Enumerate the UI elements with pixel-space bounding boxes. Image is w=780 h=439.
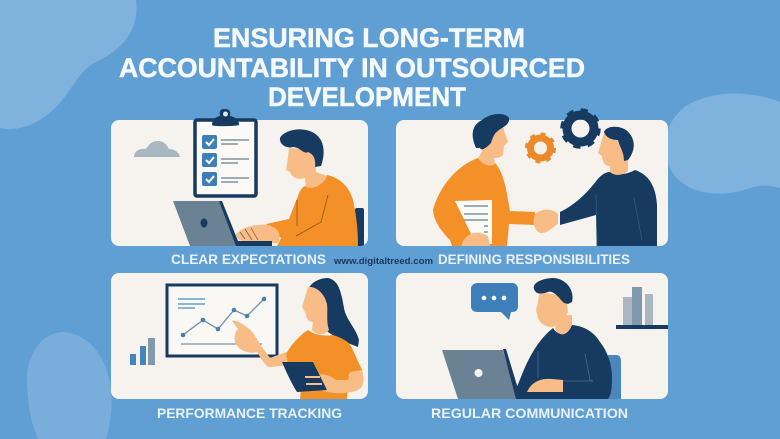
icon: chair (608, 355, 621, 399)
icon: navy gear (562, 110, 598, 146)
icon: laptop (442, 349, 519, 399)
title: DEVELOPMENT (268, 82, 466, 112)
decorative blob: top left (0, 0, 137, 129)
panel: regular communication (396, 273, 668, 399)
label: clear expectations: CLEAR EXPECTATIONS (171, 251, 326, 267)
watermark url: www.digitaltreed.com (333, 256, 433, 267)
panel: clear expectations (111, 109, 368, 248)
chart: screen with line graph (167, 285, 277, 356)
icon: cloud (134, 141, 180, 157)
label: defining responsibilities: DEFINING RESPONSIBILITIES (438, 251, 630, 267)
icon: clipboard checklist (195, 109, 256, 196)
icon: speech bubble (471, 283, 518, 320)
icon: shelf with books (616, 287, 668, 329)
decorative blob: bottom left (27, 332, 112, 439)
title: ACCOUNTABILITY IN OUTSOURCED (119, 53, 585, 83)
label: performance tracking: PERFORMANCE TRACKING (157, 405, 342, 421)
panel: performance tracking (111, 273, 368, 399)
icon: chair (355, 208, 364, 248)
person: woman with tablet (232, 278, 364, 399)
title: ENSURING LONG-TERM (213, 23, 525, 53)
panel: defining responsibilities (396, 110, 668, 246)
person: man in navy (560, 127, 657, 246)
person: man in orange (236, 129, 358, 246)
person: man in navy at laptop (512, 278, 612, 399)
person: man in orange with document (433, 114, 558, 246)
document (455, 200, 492, 244)
label: regular communication: REGULAR COMMUNICATION (431, 405, 628, 421)
icon: orange gear (526, 134, 554, 162)
icon: laptop (173, 201, 272, 246)
icon: small bar chart (130, 338, 155, 365)
decorative blob: right (665, 93, 780, 194)
title (119, 23, 585, 112)
